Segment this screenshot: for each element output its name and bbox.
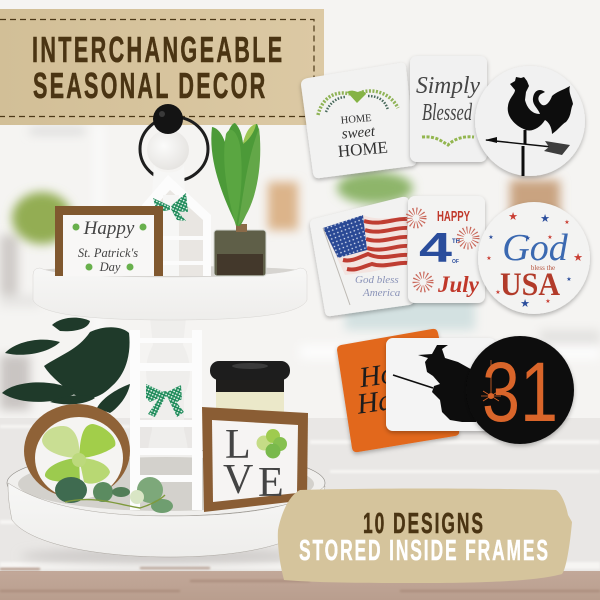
- circle: god bless the usa: ★: [540, 212, 550, 225]
- circle: god bless the usa: ★: [566, 276, 572, 283]
- circle: rooster weather vane: [475, 66, 585, 176]
- circle: god bless the usa: USA: [500, 267, 560, 303]
- card: happy 4th of july: July: [437, 272, 480, 297]
- LOVE frame: E: [258, 460, 284, 506]
- circle: god bless the usa: ★: [486, 255, 492, 262]
- card: happy 4th of july: [408, 196, 485, 303]
- round shamrock frame: [24, 404, 130, 499]
- bow: upper gingham: [153, 193, 188, 221]
- card: happy halloween orange: [337, 329, 459, 452]
- circle: god bless the usa: ★: [488, 234, 494, 241]
- rooster silhouette: [508, 77, 573, 134]
- card: home sweet home: [301, 63, 416, 178]
- potted greenery: [2, 318, 130, 413]
- hyacinth plant: [211, 123, 266, 276]
- flag: [323, 215, 408, 305]
- circle: god bless the usa: ★: [564, 219, 570, 226]
- card: simply blessed: [410, 56, 487, 162]
- design cards row 2: [310, 196, 590, 316]
- circle: god bless the usa: ★: [495, 289, 501, 296]
- St Patrick's frame: [55, 206, 163, 276]
- St Patrick's frame: Day: [99, 260, 121, 274]
- circle: god bless the usa: [478, 202, 590, 314]
- card: happy halloween orange: Hal: [354, 383, 403, 421]
- card: god bless america flag: America: [362, 287, 401, 299]
- card: home sweet home: sweet: [341, 124, 377, 143]
- lantern: [140, 104, 211, 276]
- greenery sprigs: [55, 477, 173, 513]
- circle: god bless the usa: ★: [547, 234, 553, 241]
- title heading: SEASONAL DECOR: [33, 66, 265, 106]
- bottom tray body: [7, 450, 325, 557]
- card: witch: [386, 338, 496, 431]
- callout subtext: STORED INSIDE FRAMES: [299, 535, 548, 567]
- LOVE frame: L: [225, 422, 251, 468]
- circle: god bless the usa: ★: [520, 297, 530, 310]
- callout heading: 10 DESIGNS: [363, 508, 483, 540]
- bow: lower gingham: [146, 384, 184, 417]
- card: happy 4th of july: TH: [452, 239, 460, 245]
- card: home sweet home: HOME: [340, 113, 372, 127]
- card: happy 4th of july: 4: [419, 224, 453, 271]
- circle: god bless the usa: ★: [573, 251, 583, 264]
- ladder: [130, 330, 202, 510]
- LOVE frame: V: [223, 457, 253, 503]
- card: god bless america flag: [310, 197, 414, 316]
- circle: god bless the usa: God: [502, 227, 569, 269]
- top tray plate: [33, 266, 307, 320]
- card: happy 4th of july: OF: [452, 259, 459, 265]
- circle: god bless the usa: ★: [508, 210, 518, 223]
- card: god bless america flag: God bless: [355, 274, 399, 286]
- circle: 31 spider: 31: [482, 345, 558, 439]
- shamrock: [256, 429, 287, 458]
- card: home sweet home: HOME: [337, 138, 389, 161]
- St Patrick's frame: Happy: [83, 218, 135, 239]
- card: happy halloween orange: Ho: [356, 358, 397, 394]
- tiered tray: [2, 104, 325, 557]
- design cards row 3: [337, 329, 574, 452]
- callout badge: [278, 488, 572, 583]
- card: simply blessed: Blessed: [422, 100, 473, 126]
- bottom tray front lip: [8, 483, 325, 557]
- card: happy 4th of july: HAPPY: [437, 208, 470, 225]
- design cards row 1: [301, 56, 585, 178]
- title heading: [32, 30, 282, 106]
- circle: god bless the usa: bless the: [531, 264, 555, 272]
- St Patrick's frame: St. Patrick's: [78, 246, 138, 260]
- title banner: [0, 9, 324, 125]
- jar: [210, 361, 290, 412]
- stem: [146, 318, 190, 505]
- circle: god bless the usa: ★: [545, 298, 551, 305]
- card: simply blessed: Simply: [416, 73, 480, 99]
- title heading: INTERCHANGEABLE: [32, 30, 282, 70]
- LOVE frame: [202, 407, 308, 512]
- circle: god bless the usa: ★: [525, 235, 531, 242]
